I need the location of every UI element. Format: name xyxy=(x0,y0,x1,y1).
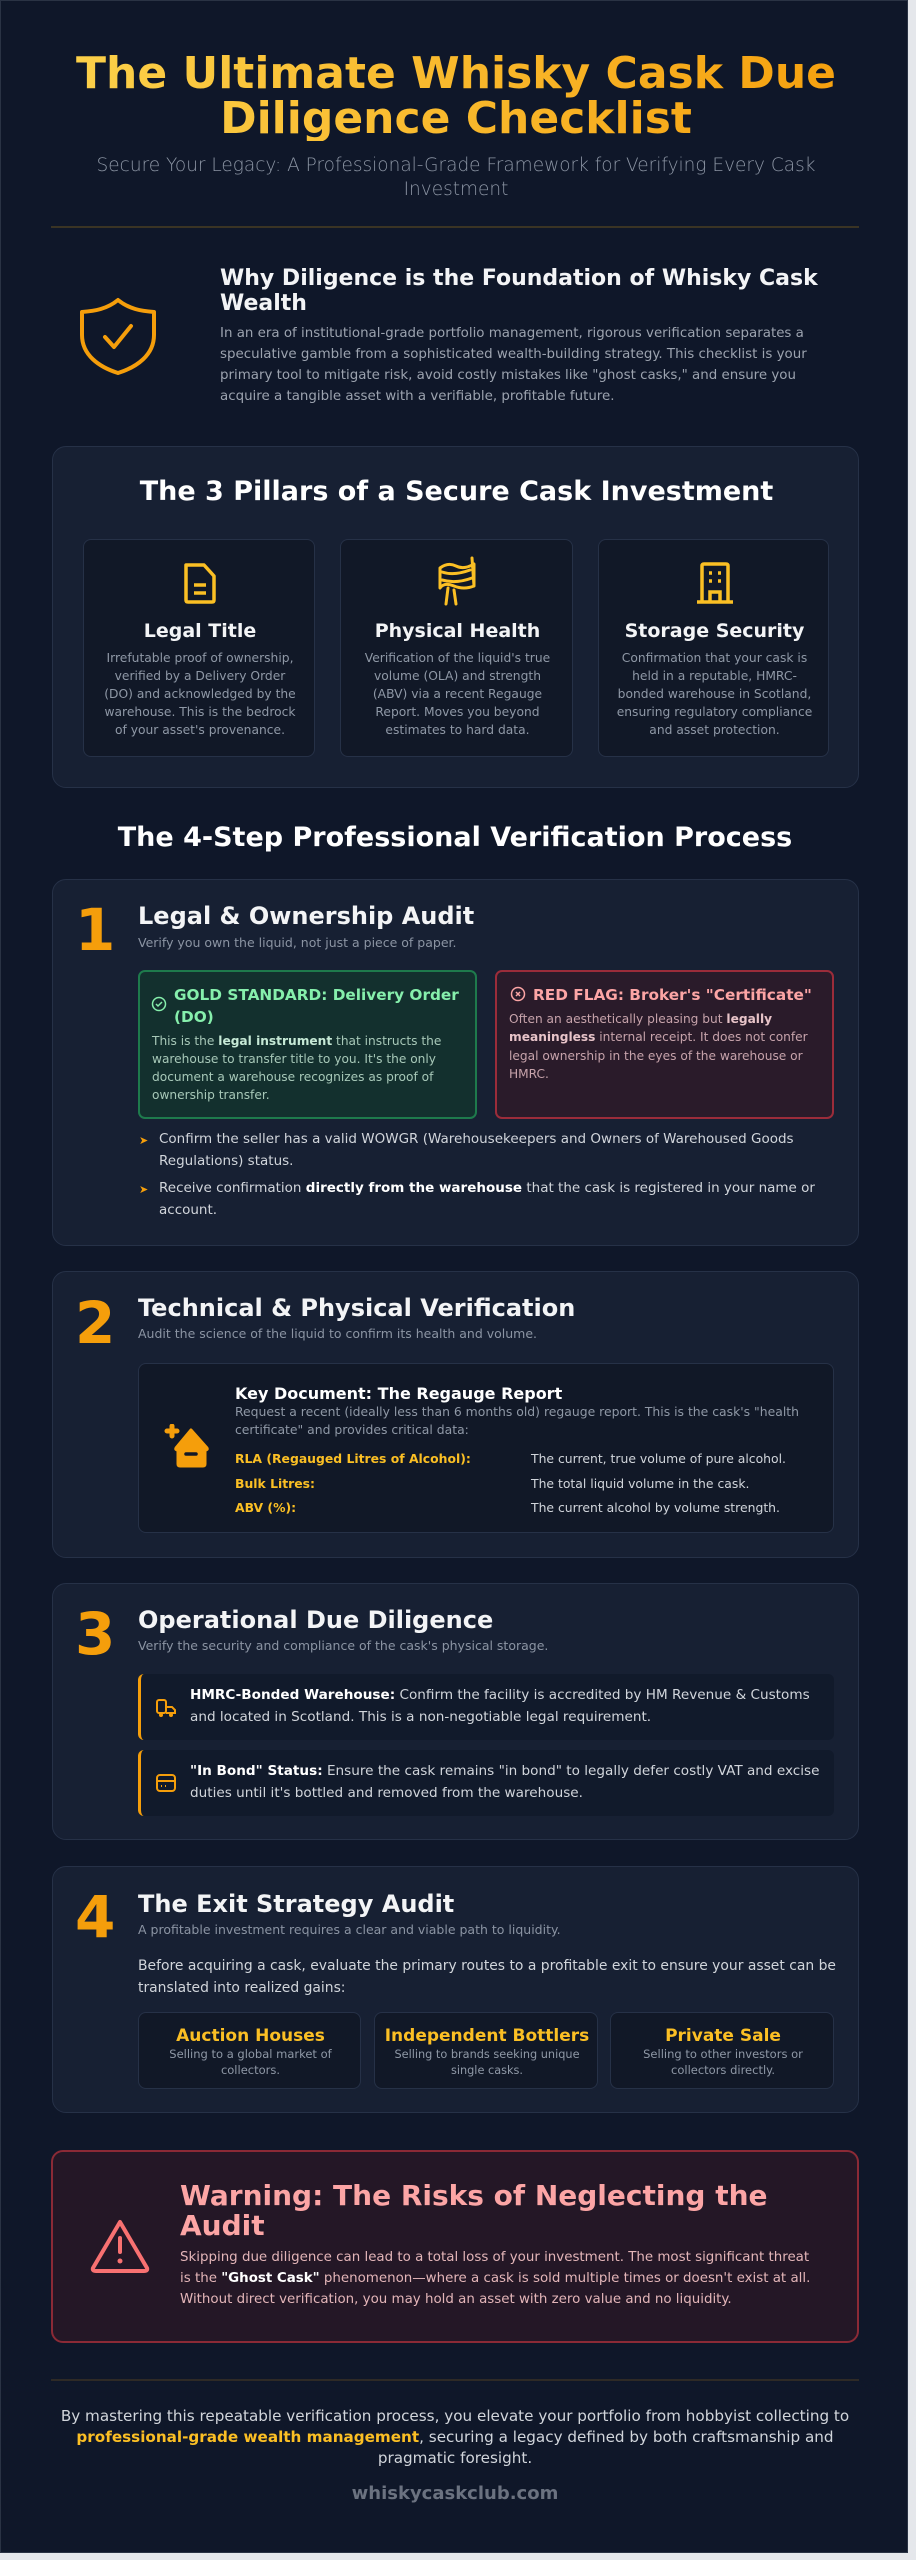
panel: step 2 xyxy=(52,1271,859,1558)
data rows: The current, true volume of pure alcohol. xyxy=(531,1451,786,1466)
callout: red flag: RED FLAG: Broker's "Certificate" xyxy=(533,986,812,1004)
pillar: storage security: Storage Security xyxy=(625,620,804,642)
callout: red flag xyxy=(495,970,834,1119)
exit card: private xyxy=(610,2012,834,2089)
step 4 number: 4 xyxy=(75,1883,115,1951)
step 3 heading: Operational Due Diligence xyxy=(138,1606,493,1634)
exit card: auction xyxy=(138,2012,361,2089)
data rows: RLA (Regauged Litres of Alcohol): xyxy=(235,1451,471,1466)
intro heading: Why Diligence is the Foundation of Whisky Cask Wealth xyxy=(220,266,818,316)
icon: shield check xyxy=(80,298,156,375)
data rows: Bulk Litres: xyxy=(235,1476,315,1490)
item: HMRC warehouse xyxy=(138,1674,834,1740)
warning text: Skipping due diligence can lead to a total loss of your investment. The most significant threat xyxy=(180,2250,809,2265)
item: HMRC warehouse: HMRC-Bonded Warehouse: Confirm the facility is accredited by HM Revenue & Customs and located in Scotland. This is a non-negotiable legal requirement. xyxy=(190,1687,810,1724)
panel: step 3 xyxy=(52,1583,859,1840)
step 3 number: 3 xyxy=(75,1600,115,1668)
warning text xyxy=(180,2250,810,2307)
callout: gold standard: This is the legal instrument that instructs the warehouse to transfer title to you. It's the only document a warehouse recognizes as proof of ownership transfer. xyxy=(152,1034,441,1102)
data rows: The current alcohol by volume strength. xyxy=(531,1500,780,1515)
pillars heading: The 3 Pillars of a Secure Cask Investment xyxy=(140,476,773,507)
pillar: physical health: Verification of the liquid's true volume (OLA) and strength (ABV) via a recent Regauge Report. Moves you beyond estimates to hard data. xyxy=(365,651,550,737)
exit card: private: Private Sale xyxy=(665,2026,781,2046)
pillar: physical health: Physical Health xyxy=(375,620,540,642)
step 2 heading: Technical & Physical Verification xyxy=(138,1294,575,1322)
key document box xyxy=(138,1363,834,1533)
pillar: storage security xyxy=(598,539,829,757)
step 1 number: 1 xyxy=(75,896,115,964)
step 2 number: 2 xyxy=(75,1289,115,1357)
step 4 subtitle: A profitable investment requires a clear and viable path to liquidity. xyxy=(138,1922,561,1937)
footer text: By mastering this repeatable verification process, you elevate your portfolio from hobbyist collecting to professional-grade wealth management, securing a legacy defined by both craftsmanship and pragmatic foresight. xyxy=(61,2407,849,2467)
callout: gold standard xyxy=(138,970,477,1119)
step 2 subtitle: Audit the science of the liquid to confirm its health and volume. xyxy=(138,1326,537,1341)
icon: warning triangle xyxy=(90,2220,150,2273)
bullet: WOWGR: ➤ xyxy=(139,1134,148,1147)
step 4 text: Before acquiring a cask, evaluate the primary routes to a profitable exit to ensure your asset can be translated into realized gains: xyxy=(138,1958,836,1996)
intro text: In an era of institutional-grade portfolio management, rigorous verification separates a speculative gamble from a sophisticated wealth-building strategy. This checklist is your primary tool to mitigate risk, avoid costly mistakes like "ghost casks," and ensure you acquire a tangible asset with a verifiable, profitable future. xyxy=(220,326,807,404)
pillar: physical health xyxy=(340,539,573,757)
icon: document xyxy=(184,563,216,604)
bullet: warehouse confirmation: Receive confirmation directly from the warehouse that the cask is registered in your name or account. xyxy=(159,1180,815,1218)
exit card: auction: Auction Houses xyxy=(176,2026,325,2046)
subtitle: Secure Your Legacy: A Professional-Grade Framework for Verifying Every Cask Investment xyxy=(97,155,815,200)
icon: scribble flag xyxy=(438,556,476,606)
callout: red flag: Often an aesthetically pleasing but legally meaningless internal receipt. It does not confer legal ownership in the eyes of the warehouse or HMRC. xyxy=(509,1012,808,1081)
step 4 heading: The Exit Strategy Audit xyxy=(138,1890,454,1918)
warning text: is the "Ghost Cask" phenomenon—where a cask is sold multiple times or doesn't exist at all. Without direct verification, you may hold an asset with zero value and no liquidity. xyxy=(180,2271,810,2307)
footer domain: whiskycaskclub.com xyxy=(352,2483,558,2504)
panel: step 1 xyxy=(52,879,859,1246)
icon: check circle xyxy=(152,996,166,1012)
item: in bond: "In Bond" Status: Ensure the cask remains "in bond" to legally defer costly VAT and excise duties until it's bottled and removed from the warehouse. xyxy=(190,1763,820,1800)
step 1 heading: Legal & Ownership Audit xyxy=(138,902,474,930)
data rows xyxy=(235,1451,786,1515)
pillar: legal title: Irrefutable proof of ownership, verified by a Delivery Order (DO) and acknowledged by the warehouse. This is the bedrock of your asset's provenance. xyxy=(104,651,296,737)
bullet: warehouse confirmation: ➤ xyxy=(139,1183,148,1196)
bullet list: step 1 xyxy=(139,1131,815,1218)
icon: truck xyxy=(156,1699,176,1717)
pillar: legal title: Legal Title xyxy=(144,620,256,642)
exit card: auction: Selling to a global market of collectors. xyxy=(169,2047,332,2076)
exit card: bottlers xyxy=(374,2012,598,2089)
callout: gold standard: GOLD STANDARD: Delivery Order (DO) xyxy=(174,986,459,1026)
heading: 4-step process: The 4-Step Professional Verification Process xyxy=(118,822,792,853)
key document box: Request a recent (ideally less than 6 months old) regauge report. This is the cask's "health certificate" and provides critical data: xyxy=(235,1404,799,1437)
exit card: private: Selling to other investors or collectors directly. xyxy=(643,2047,803,2076)
panel: 3 pillars xyxy=(52,446,859,788)
step 1 subtitle: Verify you own the liquid, not just a piece of paper. xyxy=(138,935,456,950)
item: in bond xyxy=(138,1750,834,1816)
step 3 subtitle: Verify the security and compliance of the cask's physical storage. xyxy=(138,1638,548,1653)
exit card: bottlers: Independent Bottlers xyxy=(385,2026,589,2046)
title: The Ultimate Whisky Cask Due Diligence Checklist xyxy=(76,48,836,144)
warning heading: Warning: The Risks of Neglecting the Audit xyxy=(180,2179,768,2242)
pillar: storage security: Confirmation that your cask is held in a reputable, HMRC-bonded warehouse in Scotland, ensuring regulatory compliance and asset protection. xyxy=(617,651,812,737)
icon: building xyxy=(697,562,733,604)
bullet: WOWGR: Confirm the seller has a valid WOWGR (Warehousekeepers and Owners of Warehoused Goods Regulations) status. xyxy=(159,1131,794,1168)
icon: card xyxy=(156,1774,176,1792)
icon: home plus minus xyxy=(164,1424,209,1468)
data rows: The total liquid volume in the cask. xyxy=(531,1476,749,1490)
icon: x circle xyxy=(510,986,526,1002)
key document box: Key Document: The Regauge Report xyxy=(235,1384,562,1403)
data rows: ABV (%): xyxy=(235,1500,296,1515)
warning panel xyxy=(51,2150,859,2343)
exit card: bottlers: Selling to brands seeking unique single casks. xyxy=(394,2048,580,2076)
pillar: legal title xyxy=(83,539,315,757)
panel: step 4 xyxy=(52,1866,859,2113)
